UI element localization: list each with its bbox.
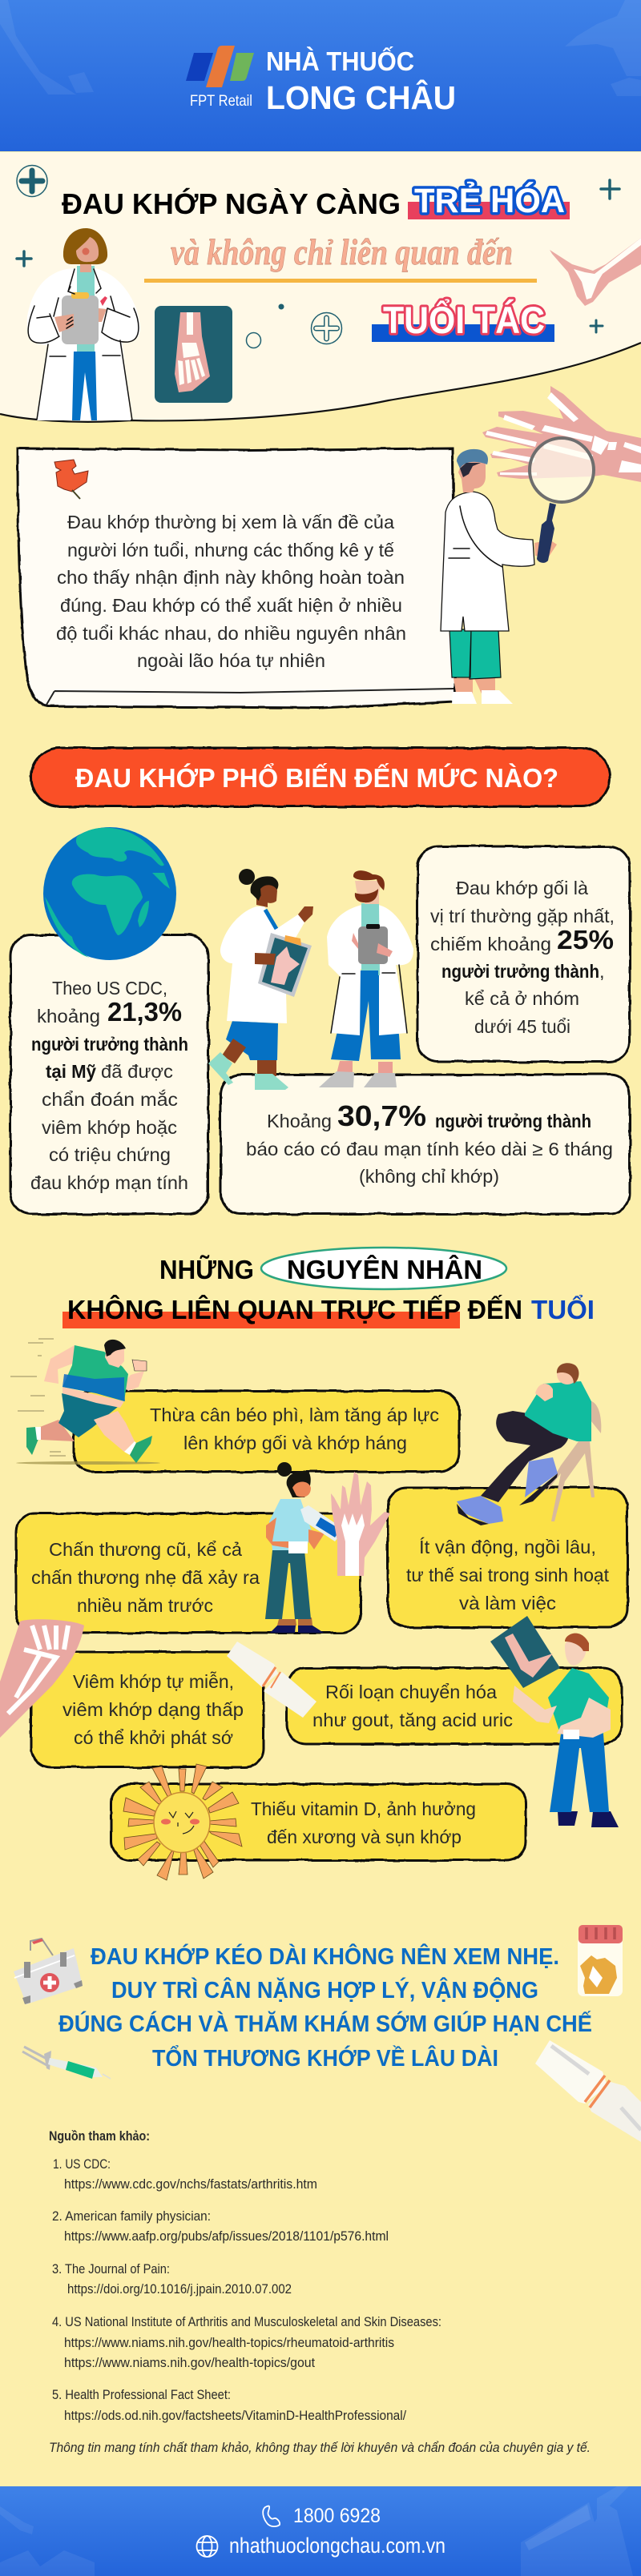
panel: card 21,3%: đau khớp mạn tính [30,1172,188,1193]
panel: sedentary: Ít vận động, ngồi lâu, [419,1537,596,1557]
text block: references: https://www.niams.nih.gov/health-topics/gout [64,2356,315,2370]
text block: references: https://www.cdc.gov/nchs/fastats/arthritis.htm [64,2177,317,2192]
illustration: woman doctor with clipboard [27,228,140,420]
text: intro paragraph [56,512,406,671]
callout: closing message: DUY TRÌ CÂN NẶNG HỢP LÝ, VẬN ĐỘNG [111,1976,538,2003]
panel: old injuries: chấn thương nhẹ đã xảy ra [31,1567,260,1588]
illustration: leg bones top right [550,238,641,306]
heading: causes [62,1248,595,1328]
illustration: overweight runner [10,1339,160,1465]
heading: causes: TUỔI [531,1295,595,1324]
text block: references: 1. US CDC: [53,2157,111,2172]
panel: card 21,3%: chẩn đoán mắc [42,1089,178,1110]
panel: card 21,3%: khoảng [37,1006,100,1027]
shirt [62,1345,128,1401]
text: intro paragraph: độ tuổi khác nhau, do nhiều nguyên nhân [56,623,406,644]
panel: card 21,3%: tại Mỹ [46,1061,96,1082]
icon: red pushpin [54,460,88,499]
section banner: how common: ĐAU KHỚP PHỔ BIẾN ĐẾN MỨC NÀO? [75,763,558,793]
panel: sedentary: và làm việc [459,1593,556,1614]
title line 3: TUỔI TÁC [383,299,545,341]
title line 2 [144,231,537,283]
panel: intro note paper [18,448,455,708]
head [105,1348,124,1368]
panel: metabolic [287,1668,622,1744]
panel: card 25%: dưới 45 tuổi [474,1016,570,1037]
panel: card 25%: Đau khớp gối là [456,878,589,898]
header band [0,0,641,151]
illustration: two doctors [208,869,413,1090]
website address: nhathuoclongchau.com.vn [229,2534,445,2558]
illustration: wrist bones left [0,1619,84,1738]
title line 2: và không chỉ liên quan đến [171,231,513,272]
icon: first aid kit [14,1939,83,2004]
panel: card 30,7%: Khoảng [267,1111,332,1131]
panel: vitamin D: đến xương và sụn khớp [267,1827,462,1847]
panel: autoimmune: Viêm khớp tự miễn, [73,1671,234,1692]
brand name [266,46,456,116]
illustration: hand x-ray [482,386,641,482]
panel: overweight: lên khớp gối và khớp háng [183,1433,407,1453]
callout: closing message: TỔN THƯƠNG KHỚP VỀ LÂU DÀI [152,2044,498,2072]
panel: card 25%: 25% [557,925,614,954]
panel: vitamin D: Thiếu vitamin D, ảnh hưởng [251,1798,476,1819]
panel: card 30,7%: (không chỉ khớp) [359,1166,499,1187]
illustration: nurse with syringe [265,1462,354,1633]
illustration: hand skeleton [331,1472,390,1576]
panel: sedentary: tư thế sai trong sinh hoạt [406,1565,609,1585]
panel: autoimmune: có thể khởi phát sớ [74,1727,233,1748]
panel: overweight: Thừa cân béo phì, làm tăng áp lực [150,1405,439,1425]
panel: card 25%: vị trí thường gặp nhất, [430,906,615,926]
shorts [58,1393,118,1437]
panel: vitamin D [111,1784,526,1860]
panel: card 30,7% [220,1075,630,1214]
panel: old injuries [16,1513,361,1633]
brand name: LONG CHÂU [266,79,456,116]
callout: closing message: ĐAU KHỚP KÉO DÀI KHÔNG NÊN XEM NHẸ. [91,1943,559,1970]
callout: closing message [58,1943,592,2072]
logo: FPT Retail mark [186,46,254,110]
panel: card 30,7%: người trưởng thành [435,1111,591,1131]
brand name: NHÀ THUỐC [266,46,414,76]
panel: card 30,7%: 30,7% [337,1099,426,1132]
illustration: man holding x-ray [490,1616,619,1827]
logo: FPT Retail mark: FPT Retail [190,93,252,110]
illustration: foot x-ray card [155,306,232,403]
woman doctor with hand x-ray [208,869,313,1090]
panel: sedentary [388,1488,627,1627]
text block: references: https://ods.od.nih.gov/factsheets/VitaminD-HealthProfessional/ [64,2409,406,2423]
panel: card 21,3% [10,935,208,1214]
text block: references: 2. American family physician: [52,2209,211,2224]
illustration: joint bones [227,1642,316,1718]
panel: old injuries: nhiều năm trước [77,1595,213,1616]
icon: web globe [197,2536,218,2557]
icon: pill bottle [578,1925,623,1996]
man doctor with clipboard [319,870,413,1087]
panel: card 25%: , [599,961,605,982]
panel: autoimmune [31,1652,264,1767]
section banner: how common [31,748,610,806]
panel: card 21,3%: có triệu chứng [49,1144,171,1165]
panel: card 21,3%: người trưởng thành [31,1034,188,1055]
text block: references: https://doi.org/10.1016/j.jpain.2010.07.002 [67,2282,292,2297]
text block: references [49,2129,441,2423]
text: intro paragraph: đúng. Đau khớp có thể xuất hiện ở nhiều [60,595,402,616]
panel: card 25% [417,846,630,1062]
panel: metabolic: Rối loạn chuyển hóa [325,1682,498,1702]
text block: references: https://www.aafp.org/pubs/afp/issues/2018/1101/p576.html [64,2229,389,2244]
footer band [0,2486,641,2576]
illustration: globe [43,827,176,960]
hero curve edge [0,343,641,422]
callout: closing message: ĐÚNG CÁCH VÀ THĂM KHÁM SỚM GIÚP HẠN CHẾ [58,2010,592,2037]
text: intro paragraph: Đau khớp thường bị xem là vấn đề của [67,512,395,532]
text block: references: Nguồn tham khảo: [49,2129,150,2144]
panel: metabolic: như gout, tăng acid uric [312,1710,513,1730]
panel: autoimmune: viêm khớp dạng thấp [62,1699,244,1720]
disclaimer: Thông tin mang tính chất tham khảo, không thay thế lời khuyên và chẩn đoán của chuyên gia y tế. [49,2441,591,2455]
arms [44,1345,75,1384]
illustration: scientist with magnifying glass [441,438,594,704]
text: intro paragraph: người lớn tuổi, nhưng các thống kê y tế [67,540,394,561]
illustration: seated man [457,1363,601,1525]
text: intro paragraph: ngoài lão hóa tự nhiên [137,650,325,671]
panel: card 21,3%: đã được [101,1061,173,1082]
panel: card 30,7%: báo cáo có đau mạn tính kéo dài ≥ 6 tháng [246,1139,613,1159]
title line 1: ĐAU KHỚP NGÀY CÀNG [62,187,401,220]
panel: card 21,3%: Theo US CDC, [52,978,167,999]
phone number: 1800 6928 [293,2505,381,2527]
text block: references: 4. US National Institute of Arthritis and Musculoskeletal and Skin Diseases: [52,2315,441,2329]
front leg [94,1411,135,1452]
back leg [40,1420,75,1441]
heading: causes: NHỮNG [159,1255,254,1284]
icon: syringe [22,2047,111,2079]
heading: causes: KHÔNG LIÊN QUAN TRỰC TIẾP ĐẾN [67,1294,522,1324]
panel: card 25%: kể cả ở nhóm [465,988,579,1009]
panel: card 25%: chiếm khoảng [430,934,551,954]
panel: old injuries: Chấn thương cũ, kể cả [49,1539,243,1560]
belly [62,1387,124,1408]
icon: magnifying lens [530,438,594,502]
icon: plus circles and dots [17,165,619,348]
panel: card 21,3%: 21,3% [107,997,182,1027]
title line 1: TRẺ HÓA [414,181,565,220]
text: intro paragraph: cho thấy nhận định này không hoàn toàn [57,567,405,588]
illustration: smiling sun [123,1764,242,1880]
panel: card 21,3%: viêm khớp hoặc [42,1117,177,1138]
text block: references: 5. Health Professional Fact Sheet: [52,2388,231,2402]
cream hero panel [0,152,641,422]
text block: references: 3. The Journal of Pain: [52,2262,170,2277]
illustration: joint bones large [535,2040,641,2142]
heading: causes: NGUYÊN NHÂN [287,1255,482,1284]
panel: card 25%: người trưởng thành [441,961,599,982]
title line 1 [62,181,570,220]
panel: overweight [74,1391,459,1472]
icon: phone [263,2506,280,2526]
text block: references: https://www.niams.nih.gov/health-topics/rheumatoid-arthritis [64,2336,394,2350]
